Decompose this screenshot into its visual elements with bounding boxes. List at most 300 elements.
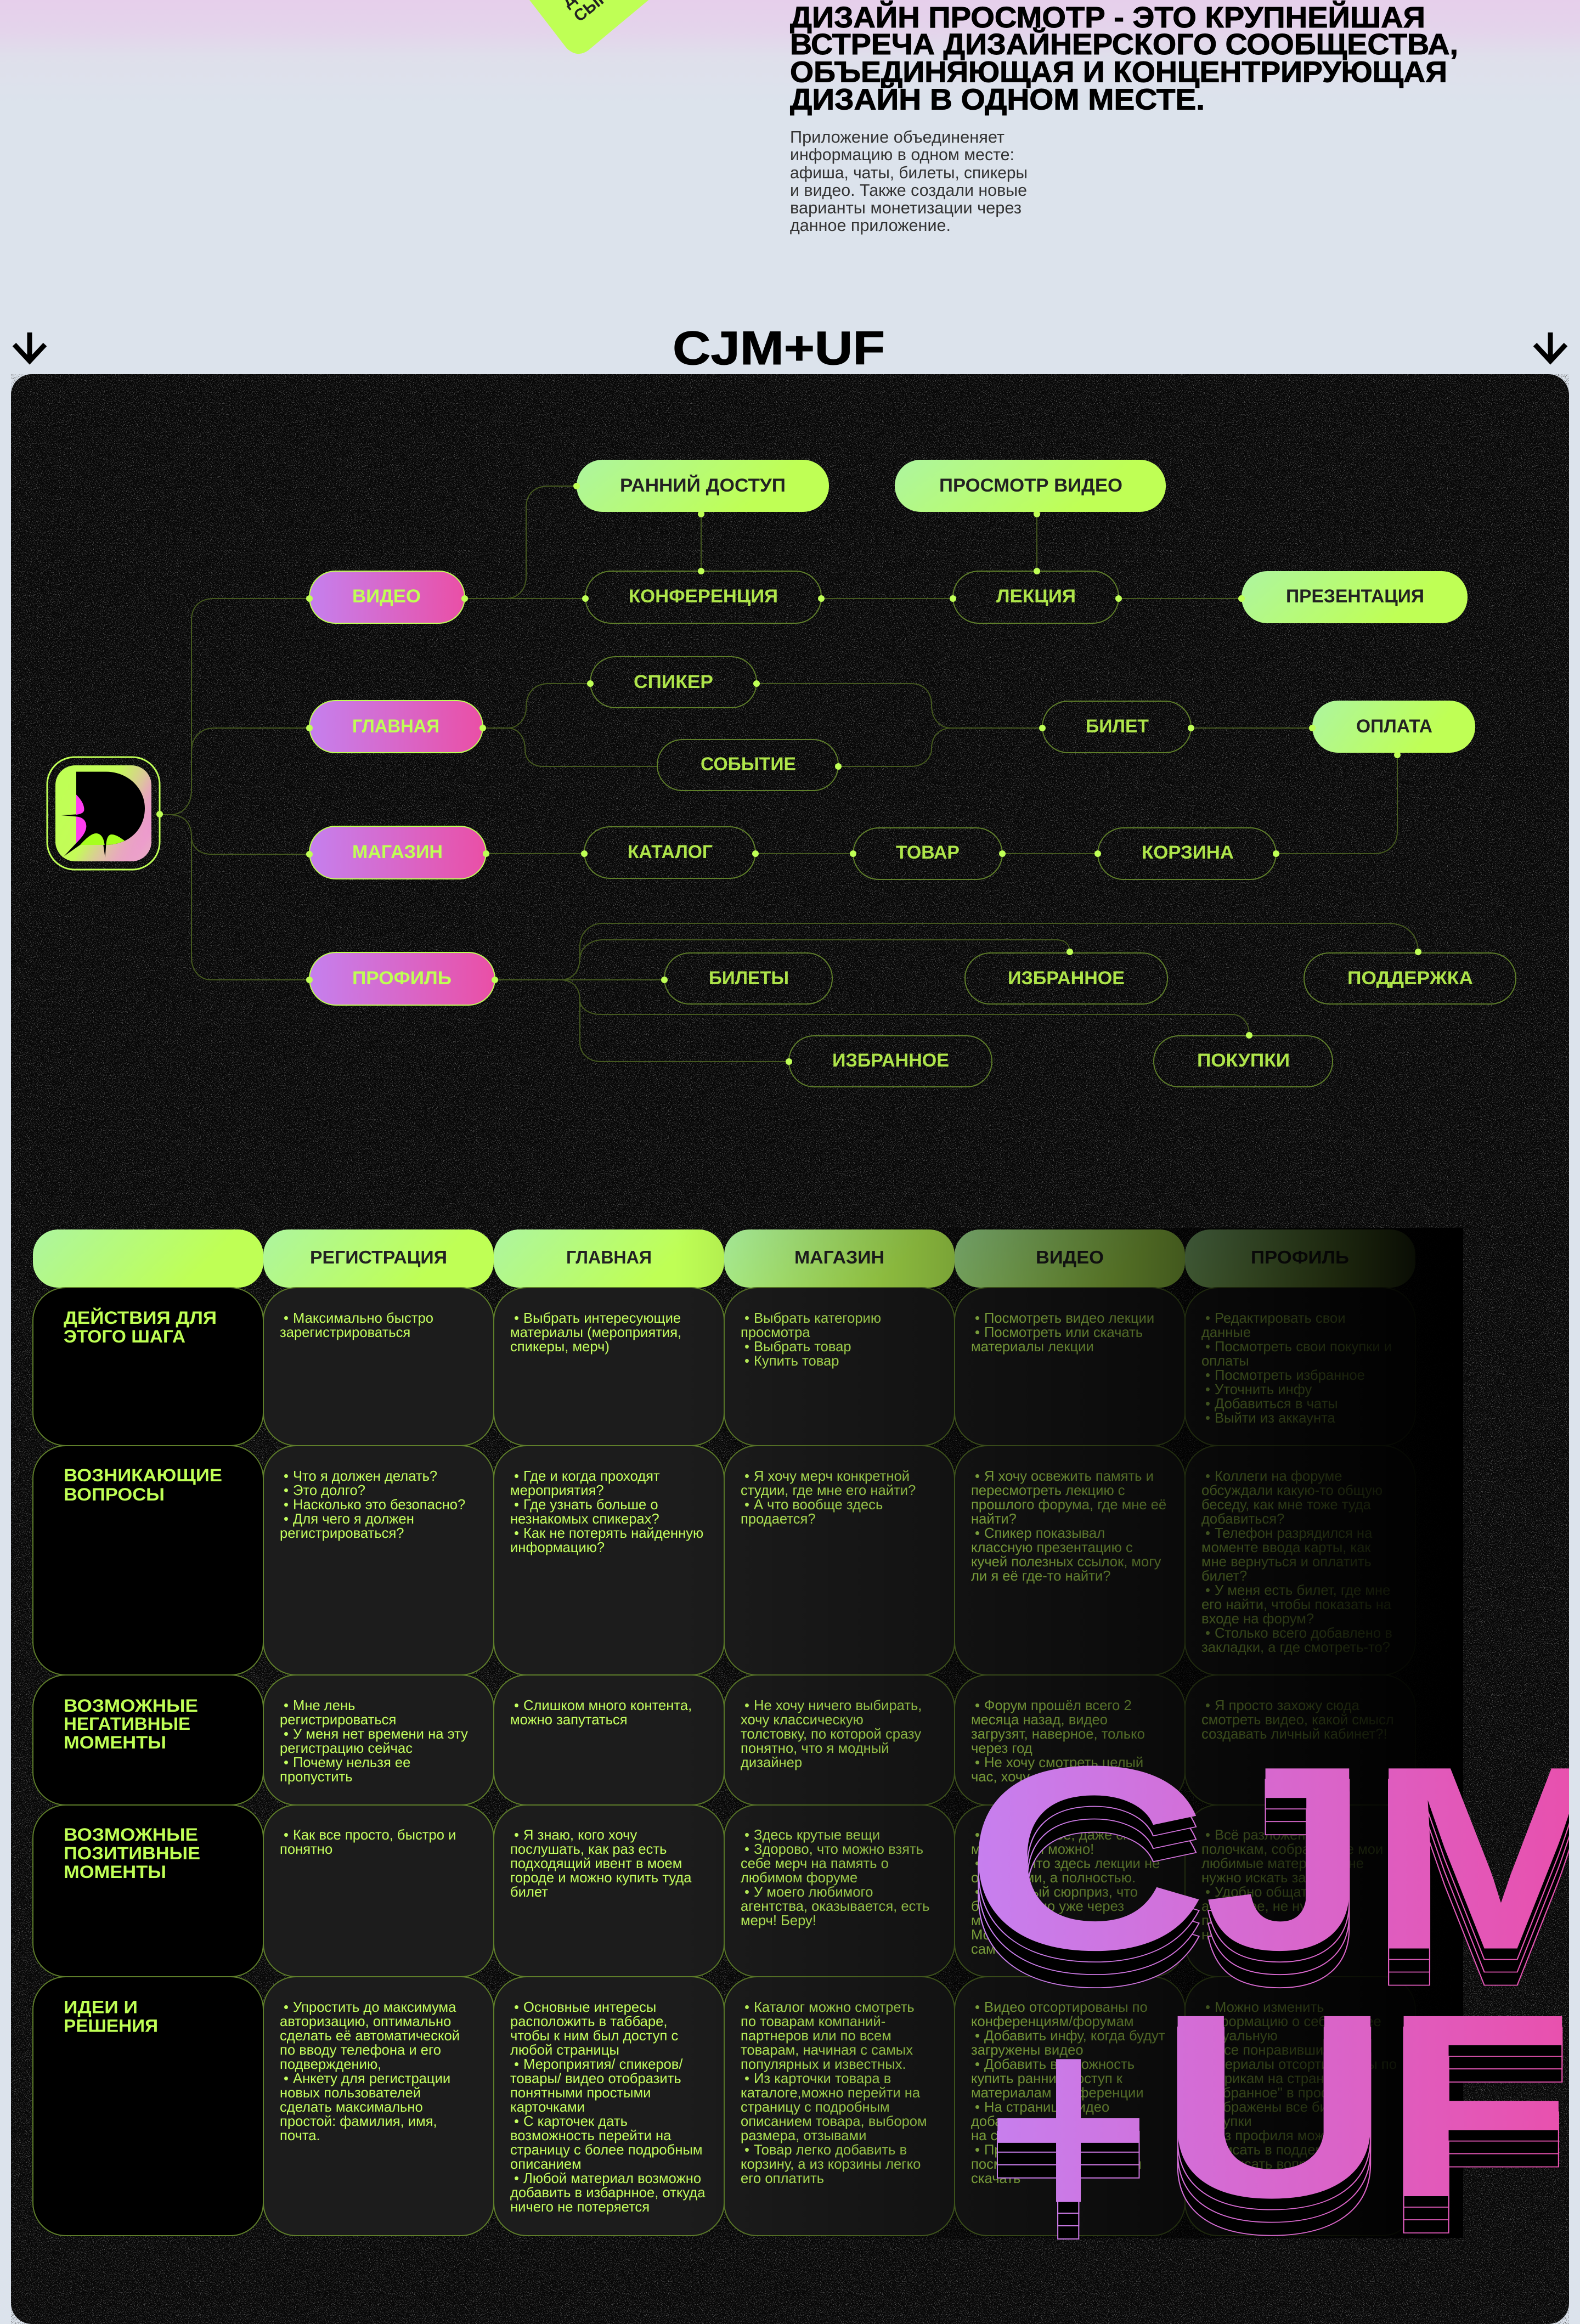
row 5: идеи и решения: • — [975, 2142, 980, 2158]
row 5: идеи и решения: • — [975, 2100, 980, 2115]
big outlined title: CJM — [978, 1765, 1569, 1988]
node: КАТАЛОГ — [584, 827, 755, 878]
row 2: вопросы: регистрироваться? — [280, 1526, 404, 1541]
row 1: действия: • — [1205, 1382, 1210, 1397]
row 5: идеи и решения: расположить в таббаре, — [510, 2014, 667, 2029]
node: БИЛЕТЫ — [664, 953, 832, 1004]
row 5: идеи и решения: Добавить возможность — [984, 2057, 1135, 2072]
row 1: действия: данные — [1201, 1325, 1251, 1340]
row 5: идеи и решения: рубрикам на странице — [1201, 2071, 1347, 2086]
letter F: F — [1383, 1983, 1573, 2276]
row 5: идеи и решения: "Избранное" в профиле — [1201, 2085, 1357, 2101]
row 5: идеи и решения: Можно изменить — [1215, 2000, 1324, 2015]
text block: app description: Приложение объединеняет — [790, 127, 1005, 146]
row 2: вопросы: кучей полезных ссылок, могу — [971, 1554, 1161, 1570]
node: СОБЫТИЕ — [657, 740, 838, 791]
row 5: идеи и решения: • — [975, 2028, 980, 2044]
row 1: действия: • — [1205, 1396, 1210, 1412]
row 1: действия: • — [975, 1325, 980, 1340]
node: МАГАЗИН: МАГАЗИН — [352, 842, 443, 862]
row 4: позитивные моменты: • — [744, 1842, 749, 1857]
node: БИЛЕТЫ: БИЛЕТЫ — [709, 968, 789, 989]
node: СПИКЕР — [590, 657, 757, 708]
row 5: идеи и решения: новых пользователей — [280, 2085, 421, 2101]
row 1: действия: • — [284, 1311, 289, 1326]
row 4: позитивные моменты: подходящий ивент в моем — [510, 1856, 682, 1871]
row 1: действия: Уточнить инфу — [1215, 1382, 1312, 1397]
row 4: позитивные моменты: билет — [510, 1885, 548, 1900]
row 1: действия: • — [744, 1353, 749, 1369]
node: КОНФЕРЕНЦИЯ — [585, 571, 821, 623]
row 3: негативные моменты: • — [514, 1698, 519, 1713]
row 4: позитивные моменты: Приятный сюрприз, что — [984, 1885, 1138, 1900]
table header row: РЕГИСТРАЦИЯ — [310, 1247, 447, 1267]
node: ПРЕЗЕНТАЦИЯ — [1242, 571, 1468, 623]
tag: rotated lime label — [528, 0, 651, 54]
row 2: вопросы: • — [1205, 1626, 1210, 1641]
letter plus: + — [983, 1987, 1154, 2314]
row 5: идеи и решения — [33, 1977, 1415, 2236]
row 1: действия: материалы лекции — [971, 1339, 1094, 1355]
row 2: вопросы: • — [1205, 1469, 1210, 1484]
row 2: вопросы: Где узнать больше о — [523, 1497, 658, 1513]
heading: intro statement: ДИЗАЙН ПРОСМОТР - ЭТО КРУПНЕЙШАЯ — [790, 1, 1425, 34]
row 4: позитивные моменты: ПОЗИТИВНЫЕ — [64, 1843, 200, 1863]
row 5: идеи и решения: чтобы к ним был доступ с — [510, 2028, 678, 2044]
node: ПРОФИЛЬ — [309, 952, 495, 1005]
row 3: негативные моменты: МОМЕНТЫ — [64, 1733, 166, 1752]
row 2: вопросы: Телефон разрядился на — [1215, 1526, 1373, 1541]
node: ОПЛАТА — [1312, 701, 1475, 753]
row 2: вопросы: • — [514, 1469, 519, 1484]
letter U: U — [1159, 1971, 1390, 2263]
row 5: идеи и решения: материалам конференции — [971, 2085, 1144, 2101]
node: ПОКУПКИ: ПОКУПКИ — [1197, 1050, 1290, 1071]
row 3: негативные моменты: ВОЗМОЖНЫЕ — [64, 1696, 198, 1716]
row 5: идеи и решения: • — [284, 2000, 289, 2015]
row 4: позитивные моменты: месяц. — [971, 1913, 1015, 1928]
row 3: негативные моменты: регистрацию сейчас — [280, 1741, 413, 1756]
row 5: идеи и решения: • — [975, 2000, 980, 2015]
letter U: U — [1159, 1983, 1390, 2276]
row 5: идеи и решения: написать в поддержку — [1201, 2142, 1346, 2158]
row 2: вопросы: ВОЗНИКАЮЩИЕ — [64, 1465, 222, 1485]
row 3: негативные моменты: понятно, что я модный — [741, 1741, 889, 1756]
node: БИЛЕТ: БИЛЕТ — [1086, 716, 1149, 737]
text block: app description: данное приложение. — [790, 216, 951, 235]
row 5: идеи и решения: добавить кнопку-ссылку — [971, 2114, 1128, 2129]
row 2: вопросы: мне вернуться и оплатить — [1201, 1554, 1372, 1570]
text block: app description: афиша, чаты, билеты, спикеры — [790, 163, 1028, 182]
heading: intro statement: ВСТРЕЧА ДИЗАЙНЕРСКОГО СООБЩЕСТВА, — [790, 27, 1458, 61]
row 5: идеи и решения: Каталог можно смотреть — [754, 2000, 915, 2015]
node: РАННИЙ ДОСТУП — [577, 460, 829, 512]
row 5: идеи и решения: подверждению, — [280, 2057, 381, 2072]
row 5: идеи и решения: уточнить — [1201, 2171, 1259, 2186]
row 3: негативные моменты: Почему нельзя ее — [293, 1755, 410, 1770]
row 2: вопросы: классную презентацию с — [971, 1540, 1133, 1555]
row 2: вопросы: студии, где мне его найти? — [741, 1483, 916, 1498]
row 1: действия: Посмотреть свои покупки и — [1215, 1339, 1392, 1355]
letter J: J — [1204, 1723, 1369, 2015]
row 4: позитивные моменты: Удобно общаться — [1215, 1885, 1329, 1900]
row 1: действия: • — [1205, 1311, 1210, 1326]
text block: app description: и видео. Также создали новые — [790, 180, 1027, 200]
row 3: негативные моменты: Форум прошёл всего 2 — [984, 1698, 1132, 1713]
row 5: идеи и решения: Видео отсортированы по — [984, 2000, 1148, 2015]
row 2: вопросы: беседу, как мне тоже туда — [1201, 1497, 1372, 1513]
row 2: вопросы: найти? — [971, 1511, 1017, 1527]
row 3: негативные моменты: хочу классическую — [741, 1712, 864, 1728]
row 4: позитивные моменты: отрывками, а полностью. — [971, 1870, 1136, 1886]
row 1: действия: • — [514, 1311, 519, 1326]
row 4: позитивные моменты: ВОЗМОЖНЫЕ — [64, 1825, 198, 1844]
row 3: негативные моменты: Я просто захожу сюда — [1215, 1698, 1360, 1713]
row 3: негативные моменты: смотреть видео, какой смысл — [1201, 1712, 1394, 1728]
row 3: негативные моменты: дизайнер — [741, 1755, 802, 1770]
letter F: F — [1383, 1960, 1573, 2252]
row 2: вопросы: моменте ввода карты, как — [1201, 1540, 1371, 1555]
letter J: J — [1204, 1749, 1369, 2041]
row 4: позитивные моменты: • — [1205, 1885, 1210, 1900]
row 2: вопросы: • — [284, 1483, 289, 1498]
row 5: идеи и решения: сделать максимально — [280, 2100, 423, 2115]
row 3: негативные моменты: • — [744, 1698, 749, 1713]
node: ЛЕКЦИЯ — [953, 571, 1119, 623]
row 1: действия: спикеры, мерч) — [510, 1339, 610, 1355]
row 5: идеи и решения: понятными простыми — [510, 2085, 651, 2101]
row 2: вопросы: добавиться? — [1201, 1511, 1284, 1527]
row 5: идеи и решения: и написать вопрос и — [1201, 2157, 1334, 2172]
node: ТОВАР — [853, 828, 1002, 879]
row 5: идеи и решения: актуальную — [1201, 2028, 1278, 2044]
row 5: идеи и решения: Все понравившиеся — [1215, 2043, 1346, 2058]
row 4: позитивные моменты: Всё разложено по — [1215, 1827, 1333, 1843]
row 1: действия: Посмотреть или скачать — [984, 1325, 1143, 1340]
icon: right arrow — [1535, 332, 1566, 361]
row 3: негативные моменты: • — [284, 1698, 289, 1713]
row 1: действия: • — [744, 1311, 749, 1326]
row 3: негативные моменты: • — [1205, 1698, 1210, 1713]
text block: app description — [790, 127, 1028, 235]
row 3: негативные моменты: У меня нет времени на эту — [293, 1727, 468, 1742]
row 5: идеи и решения: РЕШЕНИЯ — [64, 2016, 158, 2035]
node: ПРЕЗЕНТАЦИЯ: ПРЕЗЕНТАЦИЯ — [1286, 586, 1424, 607]
row 2: вопросы: • — [975, 1469, 980, 1484]
letter C — [978, 1765, 1200, 1988]
row 5: идеи и решения: Из профиля можно — [1215, 2128, 1340, 2144]
row 5: идеи и решения: товарам, начиная с самых — [741, 2043, 913, 2058]
row 5: идеи и решения: скачать — [971, 2171, 1020, 2186]
node: СПИКЕР: СПИКЕР — [634, 672, 713, 692]
row 3: негативные моменты: толстовку, по которой сразу — [741, 1727, 921, 1742]
row 4: позитивные моменты: • — [284, 1827, 289, 1843]
row 5: идеи и решения: ИДЕИ И — [64, 1997, 138, 2017]
row 5: идеи и решения: возможность перейти на — [510, 2128, 672, 2144]
text block: app description: информацию в одном месте: — [790, 145, 1014, 164]
row 2: вопросы: А что вообще здесь — [754, 1497, 883, 1513]
letter U: U — [1159, 1996, 1390, 2289]
fade overlay over right side of table — [675, 1228, 1463, 2238]
row 5: идеи и решения: любой страницы — [510, 2043, 619, 2058]
heading: intro statement: ДИЗАЙН В ОДНОМ МЕСТЕ. — [790, 82, 1205, 116]
row 2: вопросы: • — [514, 1526, 519, 1541]
row 4: позитивные моменты: • — [1205, 1827, 1210, 1843]
row 1: действия: Посмотреть видео лекции — [984, 1311, 1154, 1326]
row 5: идеи и решения: Любой материал возможно — [523, 2171, 701, 2186]
row 1: действия: Редактировать свои — [1215, 1311, 1346, 1326]
row 5: идеи и решения: по вводу телефона и его — [280, 2043, 441, 2058]
row 4: позитивные моменты: агентства, оказывается, есть — [741, 1899, 929, 1914]
row 5: идеи и решения: • — [514, 2114, 519, 2129]
row 4: позитивные моменты — [33, 1805, 1415, 1977]
row 2: вопросы: Где и когда проходят — [523, 1469, 660, 1484]
row 5: идеи и решения: материалы отсортированы по — [1201, 2057, 1397, 2072]
row 3: негативные моменты: НЕГАТИВНЫЕ — [64, 1714, 190, 1734]
table header row: ПРОФИЛЬ — [1251, 1247, 1349, 1267]
row 4: позитивные моменты: послушать, как раз есть — [510, 1842, 667, 1857]
connector dots — [156, 483, 1421, 1065]
row 5: идеи и решения: описанием товара, выбором — [741, 2114, 927, 2129]
row 5: идеи и решения: покупки — [1201, 2114, 1252, 2129]
row 2: вопросы: • — [284, 1511, 289, 1527]
node: ТОВАР: ТОВАР — [896, 842, 960, 863]
row 2: вопросы: Как не потерять найденную — [523, 1526, 703, 1541]
row 5: идеи и решения: На странице видео — [984, 2100, 1109, 2115]
row 2: вопросы: Столько всего добавлено в — [1215, 1626, 1392, 1641]
row 5: идеи и решения: карточками — [510, 2100, 585, 2115]
row 2: вопросы: Я хочу мерч конкретной — [754, 1469, 910, 1484]
table header row: ГЛАВНАЯ — [566, 1247, 652, 1267]
row 4: позитивные моменты: любимые материалы, не — [1201, 1856, 1364, 1871]
row 5: идеи и решения: конференциям/форумам — [971, 2014, 1133, 2029]
row 2: вопросы: его найти, чтобы показать на — [1201, 1597, 1392, 1612]
row 1: действия: • — [744, 1339, 749, 1355]
row 2: вопросы: • — [744, 1497, 749, 1513]
row 4: позитивные моменты: Скачать себе, даже скачать — [984, 1827, 1166, 1843]
title: CJM+UF: CJM+UF — [673, 322, 885, 375]
letter plus: + — [983, 1975, 1154, 2301]
row 2: вопросы: прошлого форума, где мне её — [971, 1497, 1166, 1513]
row 3: негативные моменты: Не хочу ничего выбирать, — [754, 1698, 922, 1713]
row 5: идеи и решения: его оплатить — [741, 2171, 824, 2186]
row 5: идеи и решения: простой: фамилия, имя, — [280, 2114, 437, 2129]
row 3: негативные моменты: час, хочу — [971, 1769, 1030, 1785]
row 4: позитивные моменты: Здесь крутые вещи — [754, 1827, 880, 1843]
row 5: идеи и решения: страницу с подробным — [741, 2100, 890, 2115]
node: ИЗБРАННОЕ (нижний): ИЗБРАННОЕ — [832, 1050, 949, 1071]
row 5: идеи и решения: посмотреть в сервисе или — [971, 2157, 1142, 2172]
row 5: идеи и решения: по товарам компаний- — [741, 2014, 885, 2029]
node: ВИДЕО — [309, 571, 465, 623]
row 4: позитивные моменты: • — [744, 1885, 749, 1900]
letter C: C — [964, 1723, 1208, 2015]
row 1: действия: • — [1205, 1368, 1210, 1383]
row 5: идеи и решения: купить ранний доступ к — [971, 2071, 1123, 2086]
node: ОПЛАТА: ОПЛАТА — [1356, 716, 1432, 737]
row 1: действия: Купить товар — [754, 1353, 839, 1369]
row 2: вопросы: Для чего я должен — [293, 1511, 414, 1527]
row 1: действия: просмотра — [741, 1325, 810, 1340]
row 3: негативные моменты: создавать личный кабинет?! — [1201, 1727, 1387, 1742]
letter F: F — [1383, 1996, 1573, 2289]
row 5: идеи и решения: страницу с более подробным — [510, 2142, 702, 2158]
row 3: негативные моменты: Не хочу смотреть целый — [984, 1755, 1143, 1770]
letter plus: + — [986, 1969, 1151, 2285]
row 2: вопросы: • — [744, 1469, 749, 1484]
row 1: действия: • — [1205, 1339, 1210, 1355]
node: ИЗБРАННОЕ (верхний) — [965, 953, 1167, 1004]
row 5: идеи и решения: сделать её автоматической — [280, 2028, 460, 2044]
node: ИЗБРАННОЕ (верхний): ИЗБРАННОЕ — [1008, 968, 1125, 989]
row 1: действия: Выбрать товар — [754, 1339, 851, 1355]
row 4: позитивные моменты: Круто, что здесь лекции не — [984, 1856, 1160, 1871]
row 2: вопросы: продается? — [741, 1511, 816, 1527]
row 3: негативные моменты: Слишком много контента, — [523, 1698, 692, 1713]
row 2: вопросы: входе на форум? — [1201, 1611, 1314, 1627]
row 4: позитивные моменты: Здорово, что можно взять — [754, 1842, 923, 1857]
row 3: негативные моменты: • — [284, 1727, 289, 1742]
row 5: идеи и решения: отображены все билеты и — [1201, 2100, 1372, 2115]
row 1: действия: ДЕЙСТВИЯ ДЛЯ — [64, 1308, 217, 1328]
row 4: позитивные моменты: нужно искать за — [1201, 1870, 1306, 1886]
heading: intro statement — [790, 1, 1458, 116]
row 2: вопросы: ВОПРОСЫ — [64, 1485, 165, 1504]
row 2: вопросы: билет? — [1201, 1569, 1247, 1584]
letter C: C — [964, 1712, 1208, 2004]
row 2: вопросы: ли я её где-то найти? — [971, 1569, 1110, 1584]
row 2: вопросы: Что я должен делать? — [293, 1469, 437, 1484]
row 2: вопросы: Я хочу освежить память и — [984, 1469, 1154, 1484]
row 5: идеи и решения: • — [744, 2071, 749, 2086]
node: ПРОСМОТР ВИДЕО: ПРОСМОТР ВИДЕО — [939, 475, 1122, 496]
row 4: позитивные моменты: себе мерч на память о — [741, 1856, 889, 1871]
row 2: вопросы: У меня есть билет, где мне — [1215, 1583, 1390, 1598]
row 4: позитивные моменты: Я знаю, кого хочу — [523, 1827, 637, 1843]
row 5: идеи и решения: описанием — [510, 2157, 582, 2172]
row 2: вопросы: пересмотреть лекцию с — [971, 1483, 1125, 1498]
row 2: вопросы: • — [284, 1497, 289, 1513]
row 1: действия: Выбрать интересующие — [523, 1311, 681, 1326]
row 2: вопросы: • — [514, 1497, 519, 1513]
row 3: негативные моменты: Мне лень — [293, 1698, 355, 1713]
row 4: позитивные моменты: городе и можно купить туда — [510, 1870, 692, 1886]
row 4: позитивные моменты: У моего любимого — [754, 1885, 873, 1900]
row 1: действия: Выйти из аккаунта — [1215, 1411, 1336, 1426]
node: РАННИЙ ДОСТУП: РАННИЙ ДОСТУП — [620, 475, 786, 496]
node: БИЛЕТ — [1042, 701, 1191, 753]
table: CJM grid — [33, 1229, 1415, 2236]
node: ГЛАВНАЯ — [309, 701, 483, 753]
row 5: идеи и решения: товары/ видео отобразить — [510, 2071, 681, 2086]
connector lines of user flow — [160, 486, 1418, 1062]
row 5: идеи и решения: • — [514, 2171, 519, 2186]
row 5: идеи и решения: • — [744, 2000, 749, 2015]
row 2: вопросы: Спикер показывал — [984, 1526, 1105, 1541]
letter U: U — [1159, 1960, 1390, 2252]
table header row — [33, 1229, 1415, 1288]
row 5: идеи и решения: партнеров или по всем — [741, 2028, 891, 2044]
row 2: вопросы: мероприятия? — [510, 1483, 604, 1498]
row 5: идеи и решения: • — [1205, 2000, 1210, 2015]
row 5: идеи и решения: Добавить инфу, когда будут — [984, 2028, 1165, 2044]
row 5: идеи и решения: Анкету для регистрации — [293, 2071, 450, 2086]
big outlined title: +UF — [983, 1960, 1573, 2324]
node: СОБЫТИЕ: СОБЫТИЕ — [701, 754, 796, 775]
row 1: действия: • — [1205, 1411, 1210, 1426]
row 5: идеи и решения: Товар легко добавить в — [754, 2142, 907, 2158]
row 5: идеи и решения: почта. — [280, 2128, 320, 2144]
row 2: вопросы: информацию? — [510, 1540, 605, 1555]
row 5: идеи и решения: Основные интересы — [523, 2000, 656, 2015]
letter C: C — [964, 1748, 1208, 2041]
text block: app description: варианты монетизации через — [790, 198, 1022, 217]
row 3: негативные моменты: регистрироваться — [280, 1712, 396, 1728]
row 2: вопросы: • — [975, 1526, 980, 1541]
row 4: позитивные моменты: • — [744, 1827, 749, 1843]
row 3: негативные моменты: загрузят, наверное, только — [971, 1727, 1145, 1742]
row 1: действия — [33, 1288, 1415, 1446]
row 2: вопросы: • — [284, 1469, 289, 1484]
row 5: идеи и решения: размера, отзывами — [741, 2128, 866, 2144]
row 3: негативные моменты: через год — [971, 1741, 1032, 1756]
row 4: позитивные моменты: номер — [1201, 1927, 1242, 1943]
node: ПРОФИЛЬ: ПРОФИЛЬ — [352, 968, 452, 989]
row 5: идеи и решения: • — [514, 2057, 519, 2072]
row 4: позитивные моменты: МОМЕНТЫ — [64, 1862, 166, 1882]
row 1: действия: Выбрать категорию — [754, 1311, 881, 1326]
row 2: вопросы: • — [1205, 1583, 1210, 1598]
row 2: вопросы: закладки, а где смотреть-то? — [1201, 1640, 1390, 1655]
table header row: МАГАЗИН — [794, 1247, 884, 1267]
row 1: действия: оплаты — [1201, 1353, 1249, 1369]
node: ЛЕКЦИЯ: ЛЕКЦИЯ — [996, 586, 1076, 607]
row 4: позитивные моменты: • — [514, 1827, 519, 1843]
node: ПОДДЕРЖКА: ПОДДЕРЖКА — [1347, 968, 1473, 989]
row 4: позитивные моменты: любимом форуме — [741, 1870, 857, 1886]
node: ИЗБРАННОЕ (нижний) — [789, 1036, 992, 1087]
row 3: негативные моменты: • — [975, 1755, 980, 1770]
row 5: идеи и решения: • — [1205, 2128, 1210, 2144]
row 5: идеи и решения: авторизацию, оптимально — [280, 2014, 451, 2029]
row 5: идеи и решения: Из карточки товара в — [754, 2071, 891, 2086]
letter plus: + — [983, 2000, 1154, 2324]
row 5: идеи и решения: на сервис — [971, 2128, 1036, 2144]
row 3: негативные моменты: • — [975, 1698, 980, 1713]
row 3: негативные моменты: пропустить — [280, 1769, 353, 1785]
row 5: идеи и решения: Мероприятия/ спикеров/ — [523, 2057, 683, 2072]
letter F: F — [1383, 1971, 1573, 2263]
row 5: идеи и решения: Упростить до максимума — [293, 2000, 456, 2015]
row 4: позитивные моменты: полочкам, собраны все мои — [1201, 1842, 1383, 1857]
row 2: вопросы: Коллеги на форуме — [1215, 1469, 1342, 1484]
row 4: позитивные моменты: самостоятельно — [971, 1942, 1077, 1957]
row 5: идеи и решения: • — [514, 2000, 519, 2015]
row 2: вопросы: • — [1205, 1526, 1210, 1541]
letter J: J — [1204, 1712, 1369, 2004]
row 5: идеи и решения: С карточек дать — [523, 2114, 628, 2129]
heading: intro statement: ОБЪЕДИНЯЮЩАЯ И КОНЦЕНТРИРУЮЩАЯ — [790, 56, 1447, 89]
row 5: идеи и решения: • — [744, 2142, 749, 2158]
row 2: вопросы: Насколько это безопасно? — [293, 1497, 465, 1513]
node: ВИДЕО: ВИДЕО — [352, 586, 421, 607]
row 5: идеи и решения: • — [1205, 2043, 1210, 2058]
node: КОНФЕРЕНЦИЯ: КОНФЕРЕНЦИЯ — [629, 586, 778, 607]
row 4: позитивные моменты: понятно — [280, 1842, 332, 1857]
row 5: идеи и решения: загружены видео — [971, 2043, 1084, 2058]
row 5: идеи и решения: корзину, а из корзины легко — [741, 2157, 921, 2172]
row 5: идеи и решения: ничего не потеряется — [510, 2199, 650, 2215]
